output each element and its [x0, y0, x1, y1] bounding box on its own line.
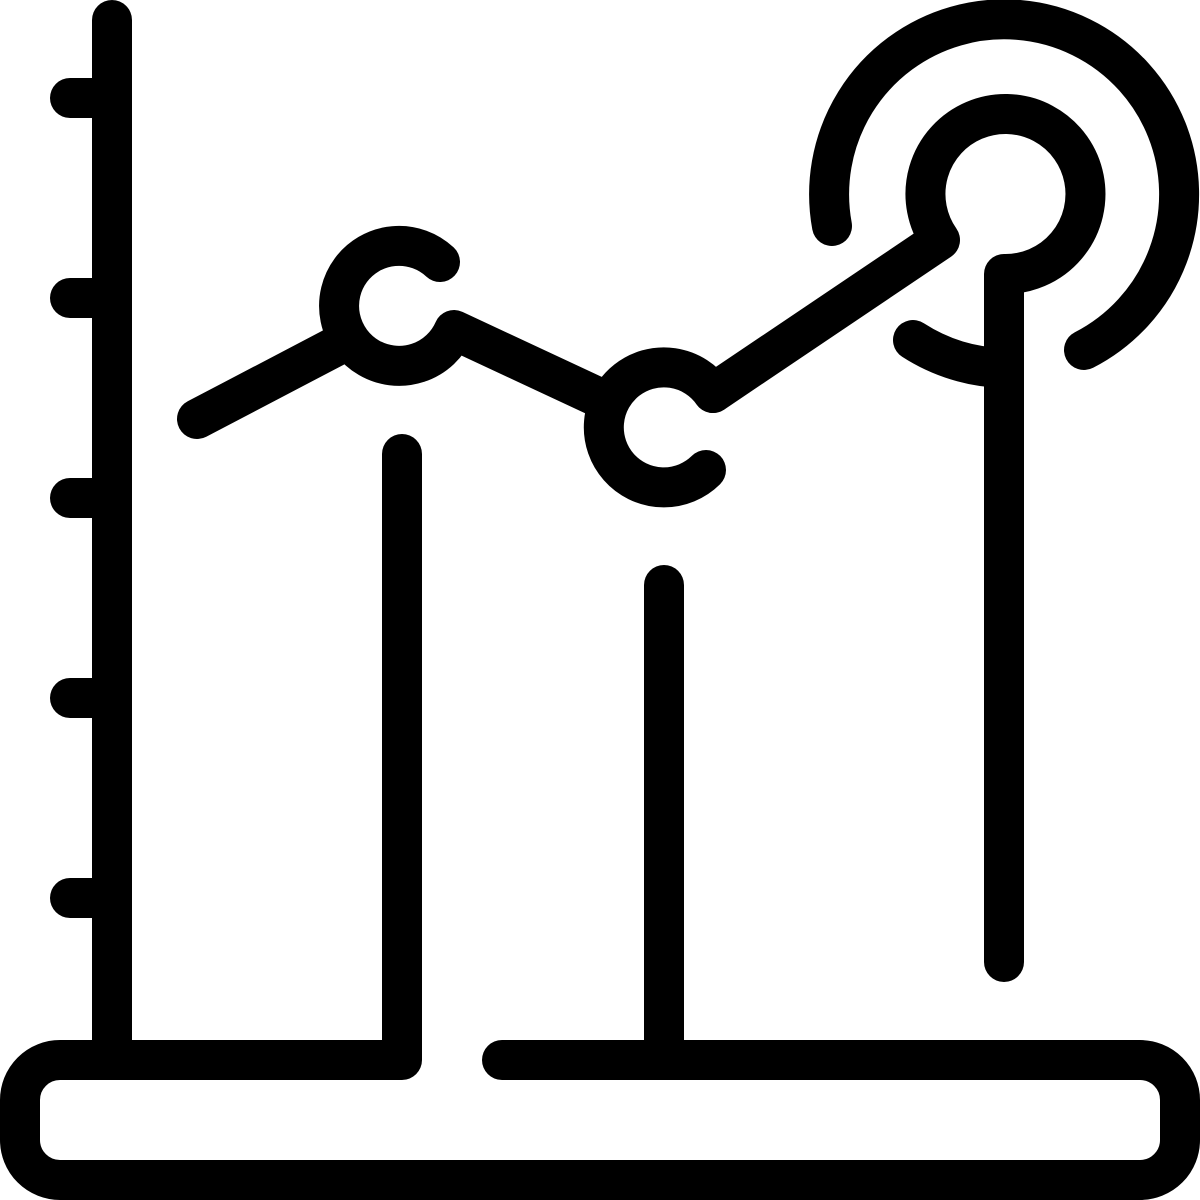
line graph with markers [197, 246, 713, 487]
third bar with target circle [713, 114, 1085, 962]
second bar [644, 585, 684, 1060]
target outer arcs [829, 19, 1179, 368]
base and first bar [20, 454, 1180, 1180]
vertical axis with ticks [70, 20, 112, 1060]
